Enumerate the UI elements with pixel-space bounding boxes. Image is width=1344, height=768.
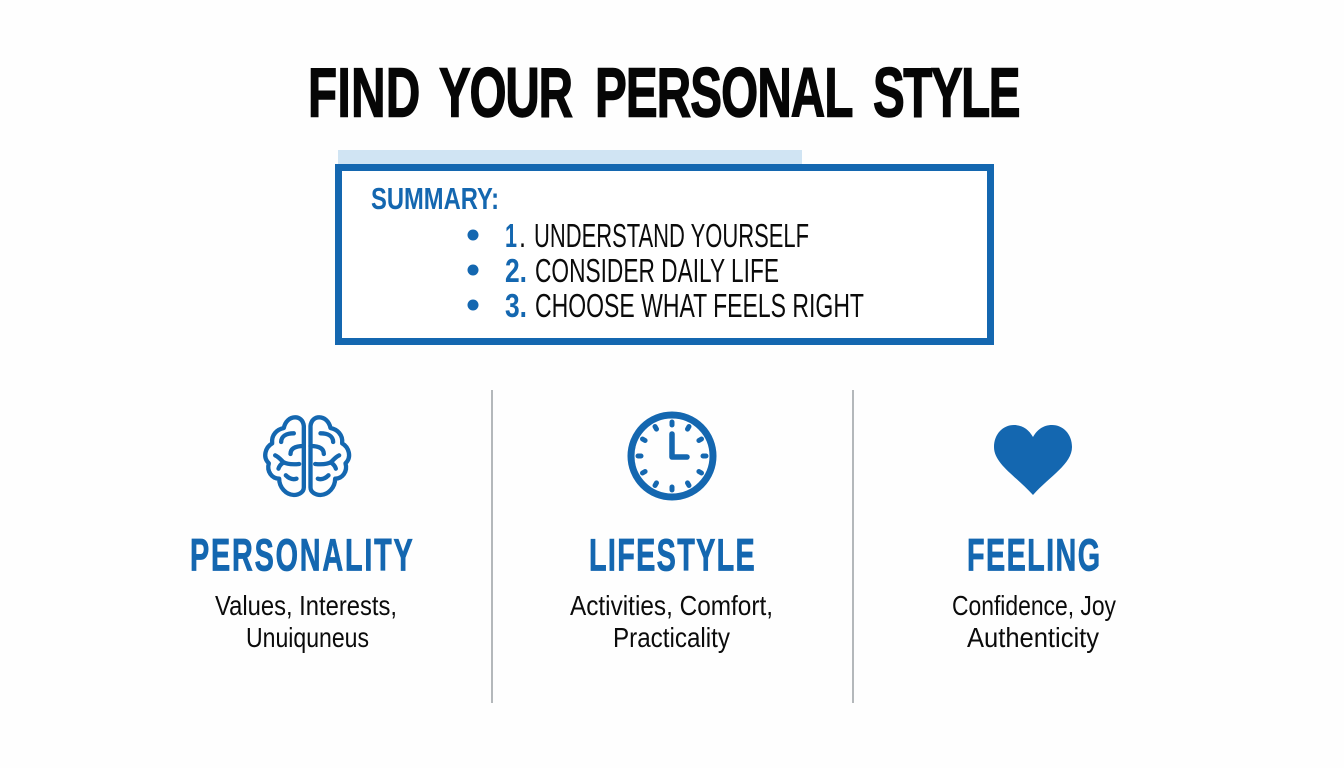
summary box border bbox=[338, 168, 990, 342]
panel: lifestyle bbox=[570, 415, 773, 653]
description: personality: Unuiquneus bbox=[246, 622, 369, 653]
description: feeling: Confidence, Joy bbox=[952, 590, 1116, 621]
icon: heart bbox=[994, 425, 1072, 495]
heading: personality: PERSONALITY bbox=[190, 531, 413, 581]
title: STYLE bbox=[873, 53, 1021, 132]
summary item 1: 1 bbox=[505, 217, 517, 254]
summary heading: SUMMARY: bbox=[371, 181, 499, 216]
description: personality bbox=[215, 590, 397, 653]
description: lifestyle: Practicality bbox=[613, 622, 730, 653]
title bbox=[308, 53, 1021, 132]
summary item 3: 3. bbox=[505, 287, 527, 324]
summary item 2: 2. bbox=[505, 252, 527, 289]
title: YOUR bbox=[439, 53, 573, 132]
heading: feeling: FEELING bbox=[967, 531, 1100, 581]
title: FIND bbox=[308, 53, 420, 132]
icon: brain bbox=[265, 417, 349, 495]
summary item 2: CONSIDER DAILY LIFE bbox=[535, 252, 779, 289]
summary item 2 bbox=[468, 252, 779, 289]
description: lifestyle bbox=[570, 590, 773, 653]
heading: lifestyle: LIFESTYLE bbox=[589, 531, 755, 581]
description: feeling bbox=[952, 590, 1116, 653]
panel: feeling bbox=[952, 425, 1116, 653]
description: lifestyle: Activities, Comfort, bbox=[570, 590, 773, 621]
summary item 3 bbox=[468, 287, 864, 324]
summary item 1: UNDERSTAND YOURSELF bbox=[534, 217, 809, 254]
icon: clock bbox=[631, 415, 713, 497]
summary item 1 bbox=[468, 217, 809, 254]
title: PERSONAL bbox=[595, 53, 853, 132]
description: feeling: Authenticity bbox=[967, 622, 1099, 653]
panel: personality bbox=[190, 417, 413, 653]
description: personality: Values, Interests, bbox=[215, 590, 397, 621]
summary item 1: . bbox=[519, 217, 526, 254]
summary item 3: CHOOSE WHAT FEELS RIGHT bbox=[535, 287, 864, 324]
panel: summary bbox=[338, 150, 990, 342]
summary tab highlight bbox=[338, 150, 802, 165]
